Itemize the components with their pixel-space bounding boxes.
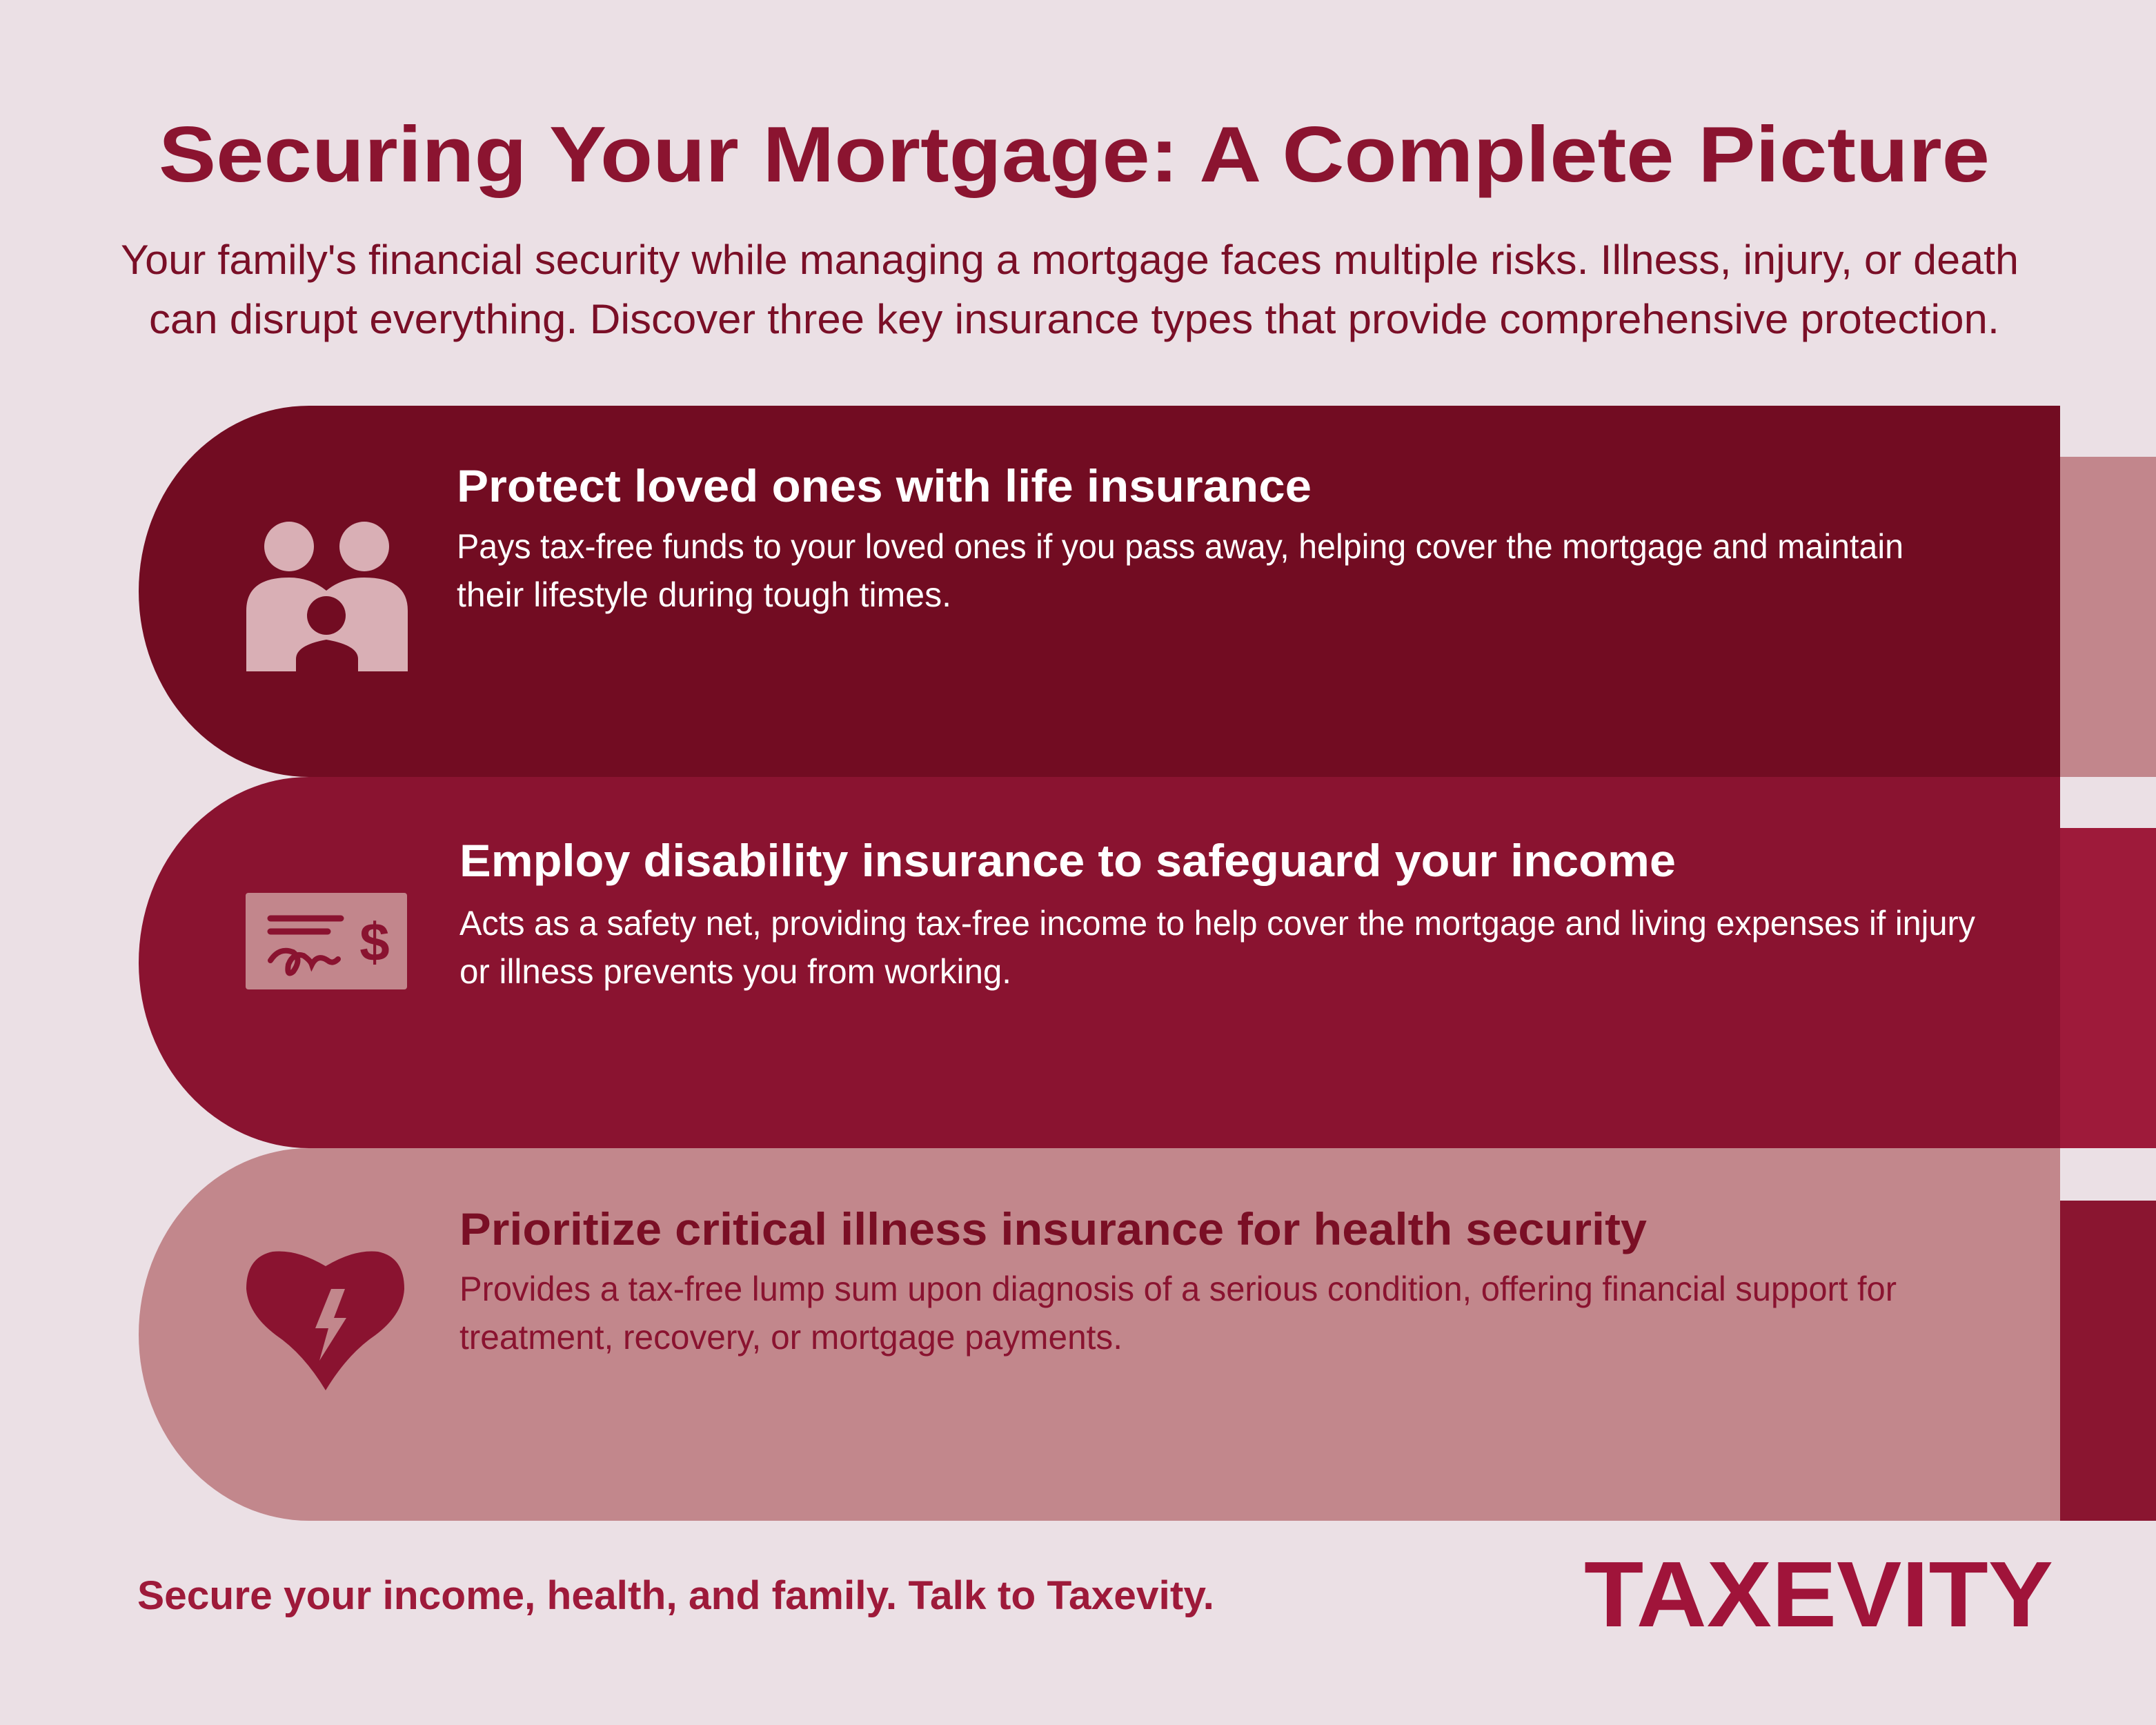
heading: disability: Employ disability insurance to safeguard your income	[459, 835, 1676, 886]
panel: life insurance	[139, 406, 2060, 777]
body: life: their lifestyle during tough times.	[457, 575, 951, 614]
body: life	[457, 527, 1903, 614]
tab: right accent 2	[2060, 828, 2156, 1148]
panel: critical illness insurance	[139, 1148, 2060, 1521]
subtitle: Your family's financial security while managing a mortgage faces multiple risks. Illness, injury, or death	[121, 237, 2019, 283]
icon: cheque	[246, 893, 407, 989]
icon: heart with bolt	[246, 1251, 404, 1390]
title: Securing Your Mortgage: A Complete Picture	[159, 111, 1990, 199]
subtitle: can disrupt everything. Discover three key insurance types that provide comprehensive protection.	[149, 296, 1999, 342]
body: critical illness: Provides a tax-free lump sum upon diagnosis of a serious condition, offering financial support for	[459, 1270, 1897, 1308]
icon: family	[246, 522, 408, 671]
subtitle	[121, 237, 2019, 342]
icon: cheque: $	[359, 911, 390, 972]
body: disability	[459, 904, 1975, 991]
tab: right accent 1	[2060, 457, 2156, 777]
body: disability: Acts as a safety net, providing tax-free income to help cover the mortgage and living expenses if injury	[459, 904, 1975, 943]
body: life: Pays tax-free funds to your loved ones if you pass away, helping cover the mortgage and maintain	[457, 527, 1903, 566]
logo: TAXEVITY: TAXEVITY	[1584, 1542, 2053, 1646]
heading: life: Protect loved ones with life insurance	[457, 460, 1312, 511]
body: critical illness	[459, 1270, 1897, 1357]
tab: right accent 3	[2060, 1201, 2156, 1521]
panel: disability insurance	[139, 777, 2060, 1148]
footer tagline: Secure your income, health, and family. Talk to Taxevity.	[137, 1573, 1214, 1618]
heading: critical illness: Prioritize critical illness insurance for health security	[459, 1203, 1647, 1254]
body: critical illness: treatment, recovery, or mortgage payments.	[459, 1318, 1122, 1357]
body: disability: or illness prevents you from working.	[459, 952, 1011, 991]
